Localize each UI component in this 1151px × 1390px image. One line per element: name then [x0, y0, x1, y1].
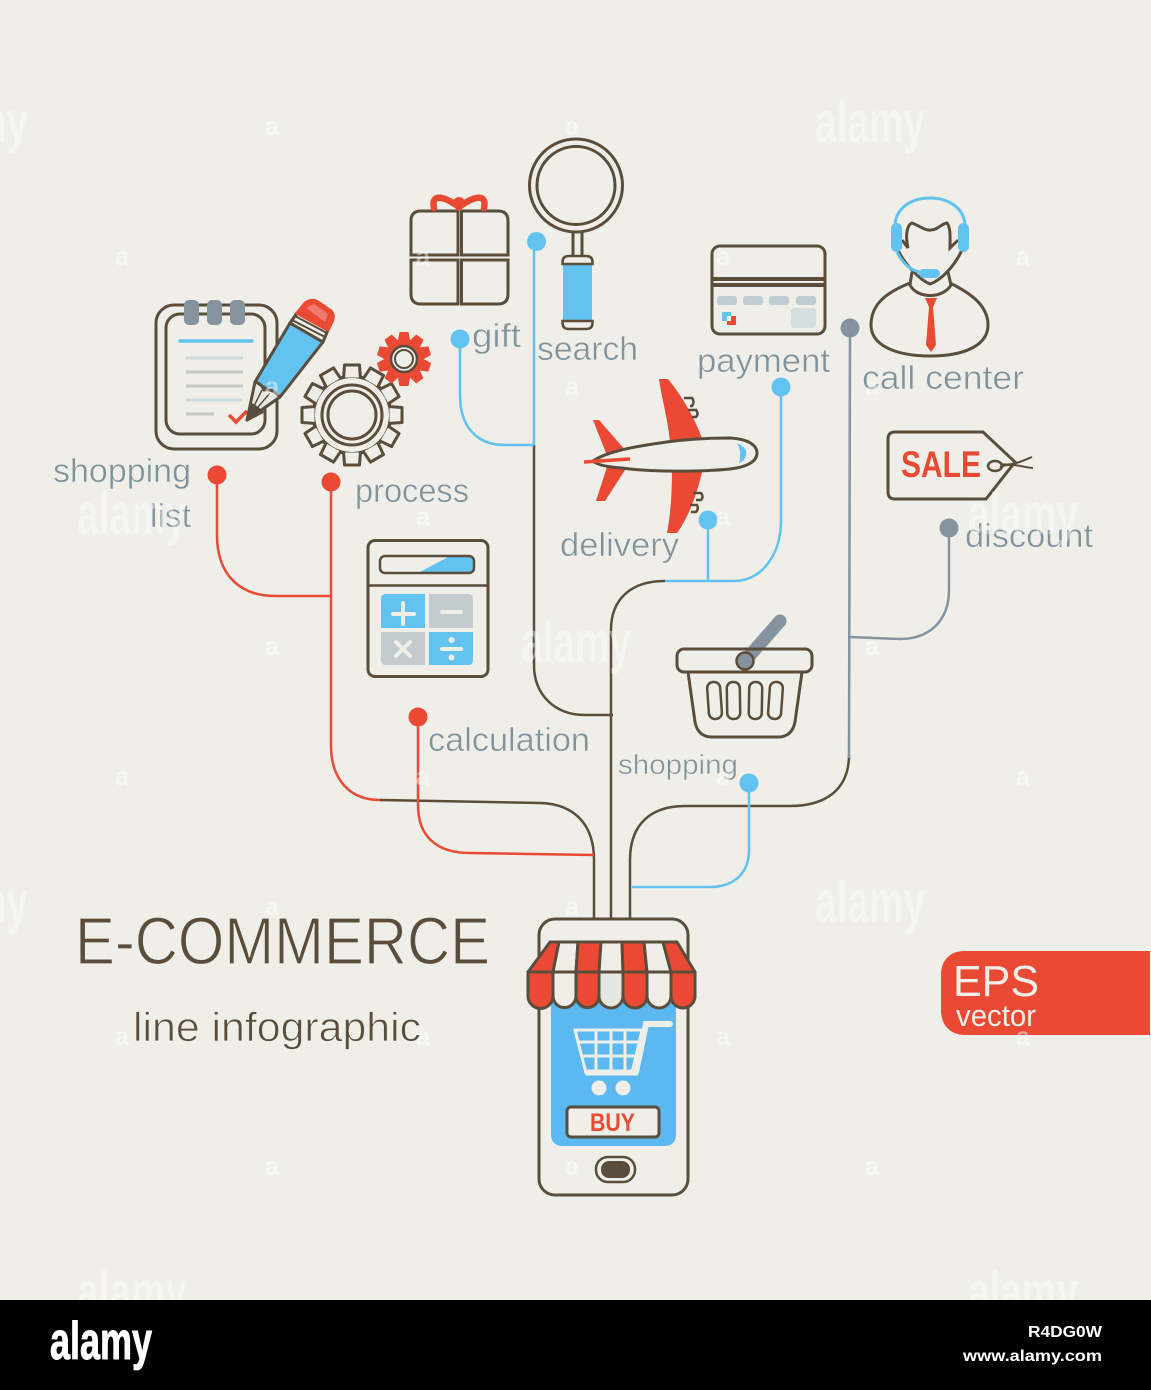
small stock watermark letters: a	[865, 1151, 880, 1181]
small stock watermark letters: a	[1016, 241, 1031, 271]
small stock watermark letters: a	[865, 631, 880, 661]
small stock watermark letters: a	[716, 1021, 731, 1051]
small stock watermark letters: a	[865, 371, 880, 401]
label: shopping list: shopping	[53, 452, 191, 489]
small stock watermark letters: a	[565, 891, 580, 921]
label: shopping list: list	[150, 497, 191, 534]
icon: airplane	[584, 379, 757, 533]
home button	[596, 1157, 635, 1182]
small stock watermark letters: a	[265, 371, 280, 401]
label: search: search	[537, 330, 638, 367]
icon: sale tag	[888, 432, 1033, 499]
footer bar: R4DG0W	[1028, 1324, 1103, 1341]
footer bar	[0, 1300, 1151, 1390]
label: call center: call center	[862, 359, 1024, 396]
footer bar: alamy	[50, 1312, 152, 1371]
phone screen	[551, 990, 676, 1146]
stock watermarks: alamy	[815, 90, 925, 155]
small stock watermark letters: a	[265, 111, 280, 141]
badge: EPS vector: vector	[956, 998, 1036, 1033]
stock watermarks: alamy	[815, 870, 925, 935]
icon: notebook	[156, 300, 277, 449]
small stock watermark letters: a	[416, 241, 431, 271]
small stock watermark letters: a	[565, 111, 580, 141]
icon: calculator	[368, 540, 488, 676]
small stock watermark letters: a	[265, 891, 280, 921]
icon: large gear	[302, 365, 402, 465]
icon: small red gear	[376, 332, 432, 386]
label: shopping list	[53, 452, 191, 534]
stock watermarks: alamy	[968, 1260, 1078, 1325]
icon: shopping basket	[677, 621, 812, 737]
icon: call center agent	[871, 198, 988, 356]
small stock watermark letters: a	[416, 501, 431, 531]
label: shopping: shopping	[618, 749, 738, 780]
icon: pencil	[247, 300, 333, 420]
small stock watermark letters: a	[565, 371, 580, 401]
title: E-COMMERCE	[75, 904, 490, 979]
subtitle: line infographic	[133, 1004, 421, 1050]
small stock watermark letters: a	[416, 761, 431, 791]
buy button	[567, 1107, 659, 1137]
awning	[528, 942, 695, 1008]
label: discount: discount	[965, 517, 1093, 554]
badge: EPS vector: EPS	[953, 957, 1039, 1006]
footer bar: www.alamy.com	[962, 1348, 1102, 1365]
stock watermarks: alamy	[77, 482, 187, 547]
small stock watermark letters: a	[1016, 1021, 1031, 1051]
badge: EPS vector	[941, 951, 1150, 1035]
label: payment: payment	[697, 342, 830, 379]
smartphone shop	[528, 919, 695, 1195]
label: gift: gift	[472, 317, 521, 354]
label: delivery: delivery	[560, 526, 680, 563]
small stock watermark letters: a	[416, 1021, 431, 1051]
stock watermarks: alamy	[968, 482, 1078, 547]
label: calculation: calculation	[428, 721, 590, 758]
small stock watermark letters: a	[115, 241, 130, 271]
small stock watermark letters	[115, 111, 1031, 1181]
buy button: BUY	[590, 1109, 635, 1137]
stock watermarks: alamy	[77, 1260, 187, 1325]
small stock watermark letters: a	[265, 1151, 280, 1181]
icon: magnifier	[530, 139, 622, 329]
small stock watermark letters: a	[565, 1151, 580, 1181]
label: process: process	[355, 472, 469, 509]
small stock watermark letters: a	[1016, 761, 1031, 791]
connector dots	[208, 232, 958, 792]
icon: gift box	[411, 197, 508, 304]
small stock watermark letters: a	[716, 501, 731, 531]
small stock watermark letters: a	[716, 761, 731, 791]
icon: sale tag: SALE	[901, 444, 981, 485]
stock watermarks: alamy	[521, 610, 631, 675]
small stock watermark letters: a	[115, 761, 130, 791]
small stock watermark letters: a	[115, 1021, 130, 1051]
small stock watermark letters: a	[716, 241, 731, 271]
shopping cart	[575, 1024, 670, 1073]
icon: credit card	[712, 246, 825, 334]
small stock watermark letters: a	[265, 631, 280, 661]
connector tree	[217, 241, 949, 920]
